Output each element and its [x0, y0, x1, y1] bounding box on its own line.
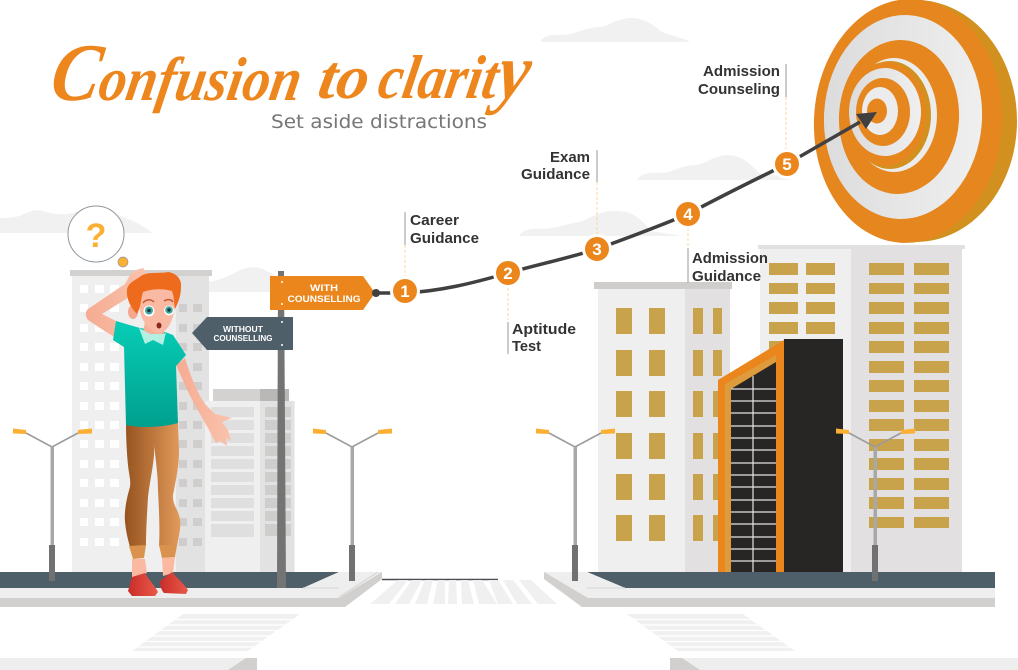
right arm and hand: [176, 358, 232, 446]
lower left crosswalk: [125, 614, 300, 651]
building: tall tower with gold windows: [758, 245, 965, 572]
right leg: [153, 421, 180, 546]
raised arm and hand: [86, 268, 147, 338]
lower right crosswalk: [627, 614, 800, 651]
title: clarity: [373, 28, 539, 116]
left road band: [0, 572, 339, 588]
building: left tower: [70, 270, 212, 572]
sign: with counselling: [270, 276, 375, 310]
bottom left pavement: [0, 658, 257, 670]
title: [45, 27, 539, 118]
thought bubble: ?: [86, 217, 106, 255]
step 4: Admission: [692, 250, 768, 267]
right road band: [587, 572, 995, 588]
step 3: Exam: [550, 149, 590, 166]
collar: [139, 328, 166, 345]
pole: [277, 271, 286, 588]
street lamp 3: [536, 428, 615, 581]
step 1: Career: [410, 212, 459, 229]
step 5: 5: [782, 155, 792, 174]
journey path and arrow: [372, 112, 877, 297]
sign: with counselling: WITH: [310, 283, 338, 294]
step 3: [521, 149, 612, 264]
right shoe: [160, 572, 188, 594]
neck: [143, 322, 166, 340]
street lamp 2: [313, 428, 392, 581]
right pavement: [544, 572, 995, 607]
sign: with counselling: COUNSELLING: [288, 294, 360, 305]
step 1: 1: [400, 282, 410, 301]
socks: [132, 557, 175, 578]
step 2: Aptitude: [512, 321, 576, 338]
step 2: [493, 258, 576, 355]
left leg: [125, 423, 156, 547]
shirt: [113, 321, 186, 427]
left pavement: [0, 572, 382, 607]
signpost: [192, 271, 375, 588]
step 3: 3: [592, 240, 602, 259]
sign: without counselling: [192, 317, 293, 350]
face: [139, 286, 176, 333]
step 4: 4: [683, 205, 693, 224]
person: [86, 268, 232, 596]
building: right block with gold windows: [594, 282, 732, 572]
step 4: Guidance: [692, 268, 761, 285]
step 3: Guidance: [521, 166, 590, 183]
trouser cuffs: [129, 545, 177, 559]
step 1: [390, 212, 479, 306]
step 1: Guidance: [410, 230, 479, 247]
clouds: [0, 18, 790, 292]
eyebrows: [143, 300, 173, 303]
street lamp 1: [13, 428, 92, 581]
step 5: Counseling: [698, 81, 780, 98]
left shoe: [128, 573, 158, 596]
sign: without counselling: WITHOUT: [223, 324, 264, 334]
mouth: [156, 322, 162, 328]
step 2: Test: [512, 338, 541, 355]
subtitle: Set aside distractions: [271, 111, 487, 133]
hair: [127, 272, 181, 314]
far kerb line: [382, 578, 498, 580]
sign: without counselling: COUNSELLING: [214, 333, 273, 343]
road and pavements: [0, 572, 1018, 670]
step 4: [673, 199, 768, 285]
step 2: 2: [503, 264, 513, 283]
title: Confusion: [45, 27, 311, 118]
bottom right pavement: [670, 658, 1018, 670]
ear: [128, 305, 138, 319]
eyes: [144, 306, 174, 316]
building: black and orange tower: [718, 339, 843, 572]
street lamp 4: [836, 428, 915, 581]
step 5: Admission: [703, 63, 780, 80]
step 5: [698, 63, 802, 179]
target: [808, 0, 1017, 248]
thought bubble: [68, 206, 128, 267]
title: to: [314, 42, 376, 112]
upper crosswalk: [370, 580, 557, 604]
building: low left block: [205, 389, 295, 572]
